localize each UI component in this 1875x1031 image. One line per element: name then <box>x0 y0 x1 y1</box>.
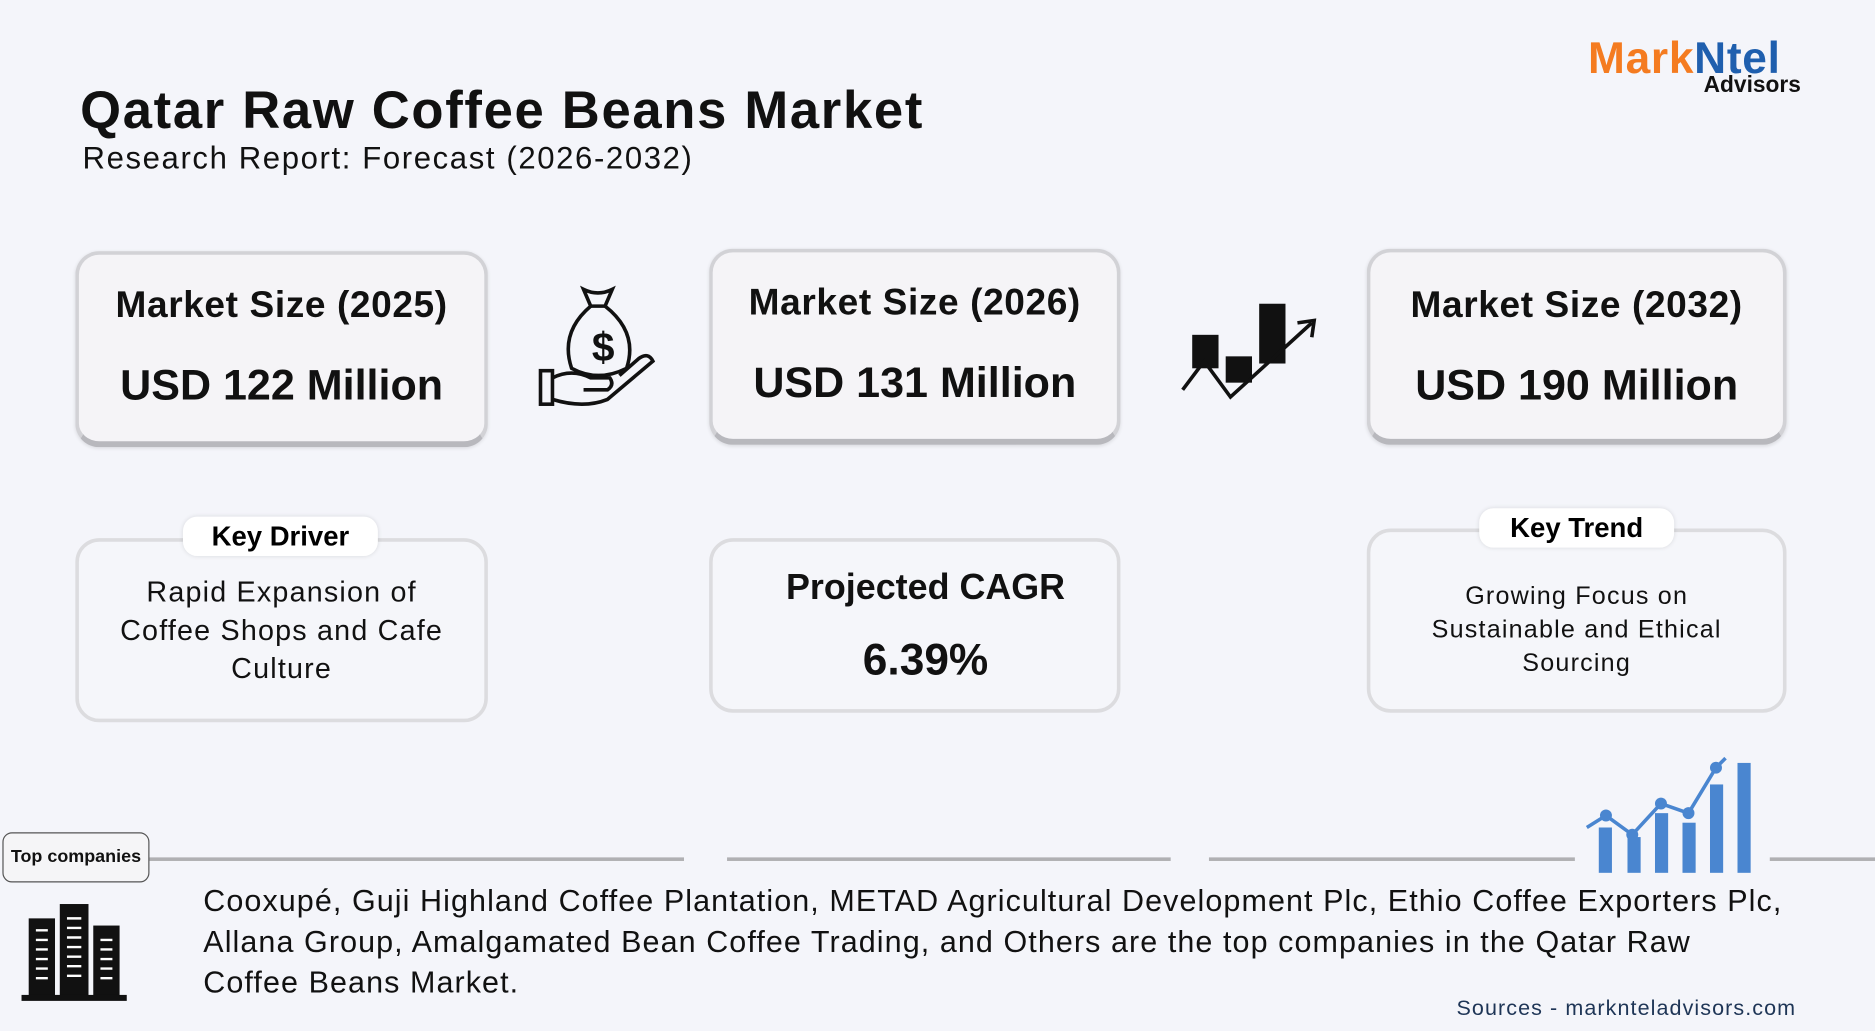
panel: key trend: Sourcing <box>1522 649 1631 677</box>
panel: projected CAGR: 6.39% <box>863 635 988 684</box>
icon: blue bar chart <box>1586 756 1751 873</box>
panel: key driver <box>75 538 488 722</box>
logo: Advisors <box>1704 73 1801 98</box>
sources: Sources - marknteladvisors.com <box>1456 996 1796 1020</box>
icon: money bag hand: $ <box>592 324 615 370</box>
text: companies: Cooxupé, Guji Highland Coffee Plantation, METAD Agricultural Development Plc, Ethio Coffee Exporters Plc, <box>203 885 1782 918</box>
label: key trend <box>1479 508 1674 548</box>
label: key driver <box>183 517 378 556</box>
label: key trend: Key Trend <box>1510 512 1643 543</box>
panel: key trend <box>1367 529 1787 713</box>
label: top companies: Top companies <box>11 847 141 867</box>
panel: key trend: Growing Focus on <box>1465 582 1688 610</box>
panel: market size 2032 <box>1367 249 1787 445</box>
panel: market size 2025: USD 122 Million <box>120 360 443 409</box>
panel: key driver: Coffee Shops and Cafe <box>120 615 443 647</box>
panel: market size 2025 <box>75 251 488 447</box>
panel: market size 2026: Market Size (2026) <box>749 281 1081 323</box>
panel: market size 2032: USD 190 Million <box>1415 360 1738 409</box>
label: key driver: Key Driver <box>212 520 349 551</box>
panel: key trend: Sustainable and Ethical <box>1432 616 1722 643</box>
panel: market size 2026 <box>709 249 1120 445</box>
panel: market size 2026: USD 131 Million <box>753 358 1076 407</box>
subtitle: Research Report: Forecast (2026-2032) <box>83 140 694 176</box>
panel: market size 2032: Market Size (2032) <box>1411 283 1743 325</box>
icon: money bag hand <box>538 286 656 406</box>
icon: buildings <box>22 904 127 1001</box>
title: Qatar Raw Coffee Beans Market <box>80 81 924 140</box>
panel: key driver: Rapid Expansion of <box>146 576 417 609</box>
panel: projected CAGR: Projected CAGR <box>786 568 1065 607</box>
panel: market size 2025: Market Size (2025) <box>116 283 448 325</box>
label: top companies <box>2 832 149 883</box>
panel: key driver: Culture <box>231 653 332 685</box>
icon: growth chart arrow <box>1181 304 1316 400</box>
text: companies: Coffee Beans Market. <box>203 966 519 1000</box>
logo: MarkNtel <box>1588 33 1781 83</box>
text: companies: Allana Group, Amalgamated Bean Coffee Trading, and Others are the top companies in the Qatar Raw <box>203 926 1691 959</box>
text: companies <box>203 885 1782 1000</box>
panel: projected CAGR <box>709 538 1120 713</box>
logo <box>1588 33 1801 98</box>
